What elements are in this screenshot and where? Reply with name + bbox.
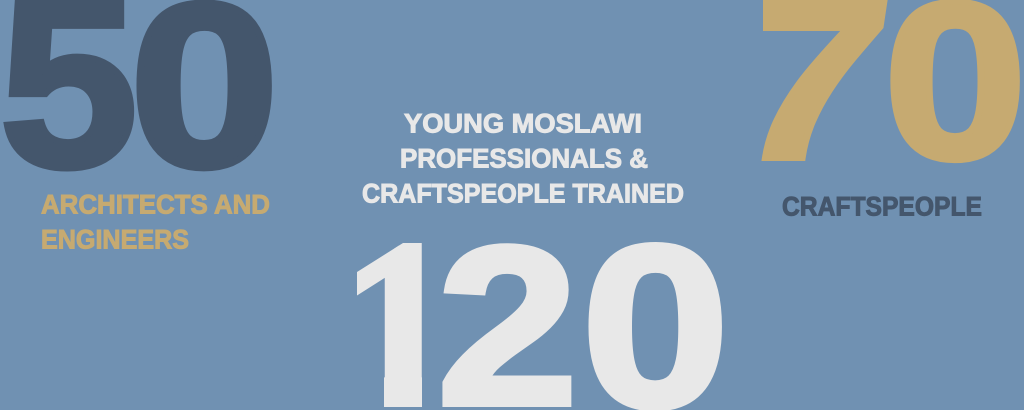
label: craftspeople: CRAFTSPEOPLE [782,192,982,222]
stat: 120 young professionals and craftspeople trained [335,108,729,410]
number: 70 [762,0,1020,164]
label: architects and engineers: ARCHITECTS AND [41,190,270,220]
number: 120 [357,242,722,410]
stat: 70 craftspeople [762,0,1020,216]
heading: young Moslawi professionals and craftspeople trained [362,108,684,208]
stat: 50 architects and engineers [0,0,279,255]
heading: young Moslawi professionals and craftspeople trained: CRAFTSPEOPLE TRAINED [362,178,684,208]
heading: young Moslawi professionals and craftspeople trained: YOUNG MOSLAWI [404,108,642,138]
label: architects and engineers: ENGINEERS [41,224,189,254]
label: architects and engineers [41,190,270,254]
number: 50 [0,0,279,217]
heading: young Moslawi professionals and craftspeople trained: PROFESSIONALS & [400,144,648,174]
